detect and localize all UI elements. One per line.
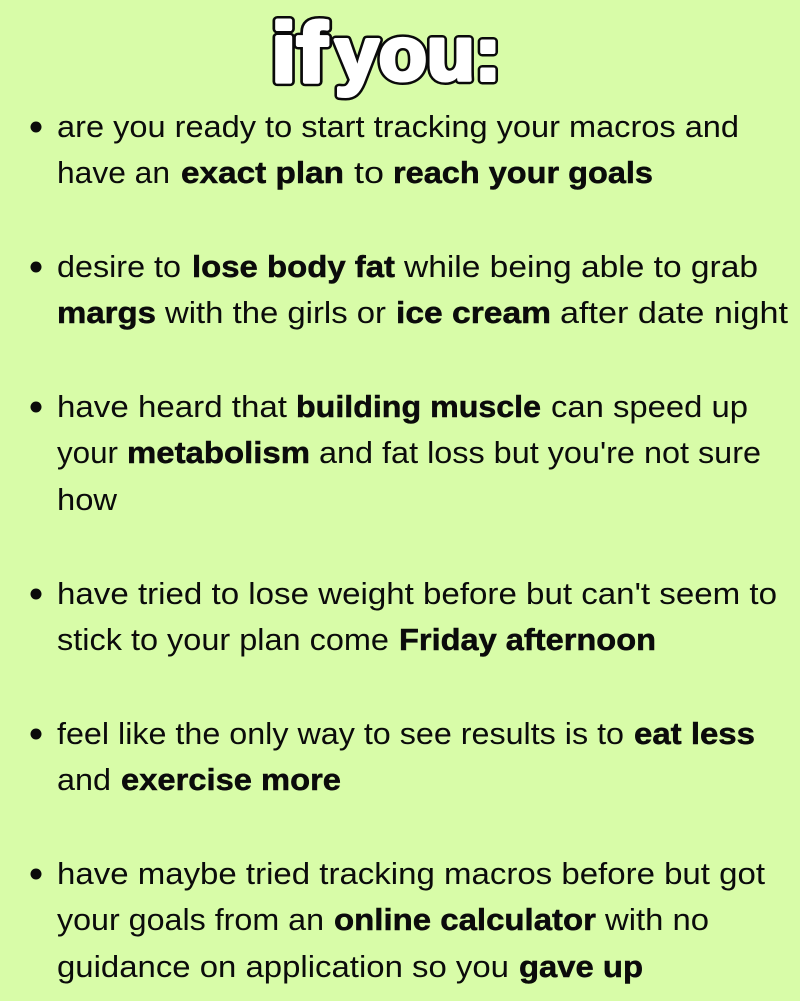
bullet item 3 bbox=[30, 389, 761, 517]
bullet item 4: stick to your plan come bbox=[57, 622, 389, 657]
bullet item 1: have an bbox=[57, 155, 170, 190]
bullet item 6: your goals from an bbox=[57, 902, 324, 937]
bullet item 4 bbox=[30, 576, 777, 657]
bullet item 2: while being able to grab bbox=[403, 249, 758, 284]
bullet item 3: your bbox=[57, 435, 118, 470]
bullet item 2: lose body fat bbox=[192, 249, 395, 284]
bullet item 1: exact plan bbox=[181, 155, 344, 190]
bullet item 3: metabolism bbox=[127, 435, 310, 470]
title: you: bbox=[335, 12, 501, 97]
bullet item 6: with no bbox=[604, 902, 709, 937]
bullet item 2: after date night bbox=[560, 295, 788, 330]
bullet item 1: reach your goals bbox=[393, 155, 653, 190]
bullet item 5: feel like the only way to see results is to bbox=[57, 716, 624, 751]
bullet item 4: Friday afternoon bbox=[399, 622, 656, 657]
bullet item 1 bbox=[30, 109, 739, 190]
bullet item 5: eat less bbox=[634, 716, 755, 751]
title: you: bbox=[335, 12, 501, 97]
title: if bbox=[271, 6, 328, 100]
bullet item 2: desire to bbox=[57, 249, 181, 284]
bullet item 2: ice cream bbox=[396, 295, 551, 330]
title bbox=[271, 6, 501, 100]
bullet item 3: have heard that bbox=[57, 389, 287, 424]
bullet item 2: with the girls or bbox=[164, 295, 386, 330]
bullet item 5: and bbox=[57, 762, 111, 797]
bullet item 6: have maybe tried tracking macros before but got bbox=[57, 856, 765, 891]
bullet item 1: are you ready to start tracking your macros and bbox=[57, 109, 739, 144]
bullet item 3: building muscle bbox=[296, 389, 541, 424]
bullet item 3: can speed up bbox=[551, 389, 748, 424]
bullet item 3: and fat loss but you're not sure bbox=[319, 435, 761, 470]
bullet item 6: guidance on application so you bbox=[57, 949, 509, 984]
title: if bbox=[271, 6, 328, 100]
bullet item 2 bbox=[30, 249, 788, 330]
bullet item 6 bbox=[30, 856, 765, 984]
bullet item 5: exercise more bbox=[121, 762, 341, 797]
bullet item 1: to bbox=[354, 155, 384, 190]
bullet item 5 bbox=[30, 716, 755, 797]
bullet item 6: online calculator bbox=[334, 902, 596, 937]
bullet item 4: have tried to lose weight before but can't seem to bbox=[57, 576, 777, 611]
bullet item 6: gave up bbox=[519, 949, 643, 984]
bullet item 3: how bbox=[57, 482, 118, 517]
bullet item 2: margs bbox=[57, 295, 156, 330]
